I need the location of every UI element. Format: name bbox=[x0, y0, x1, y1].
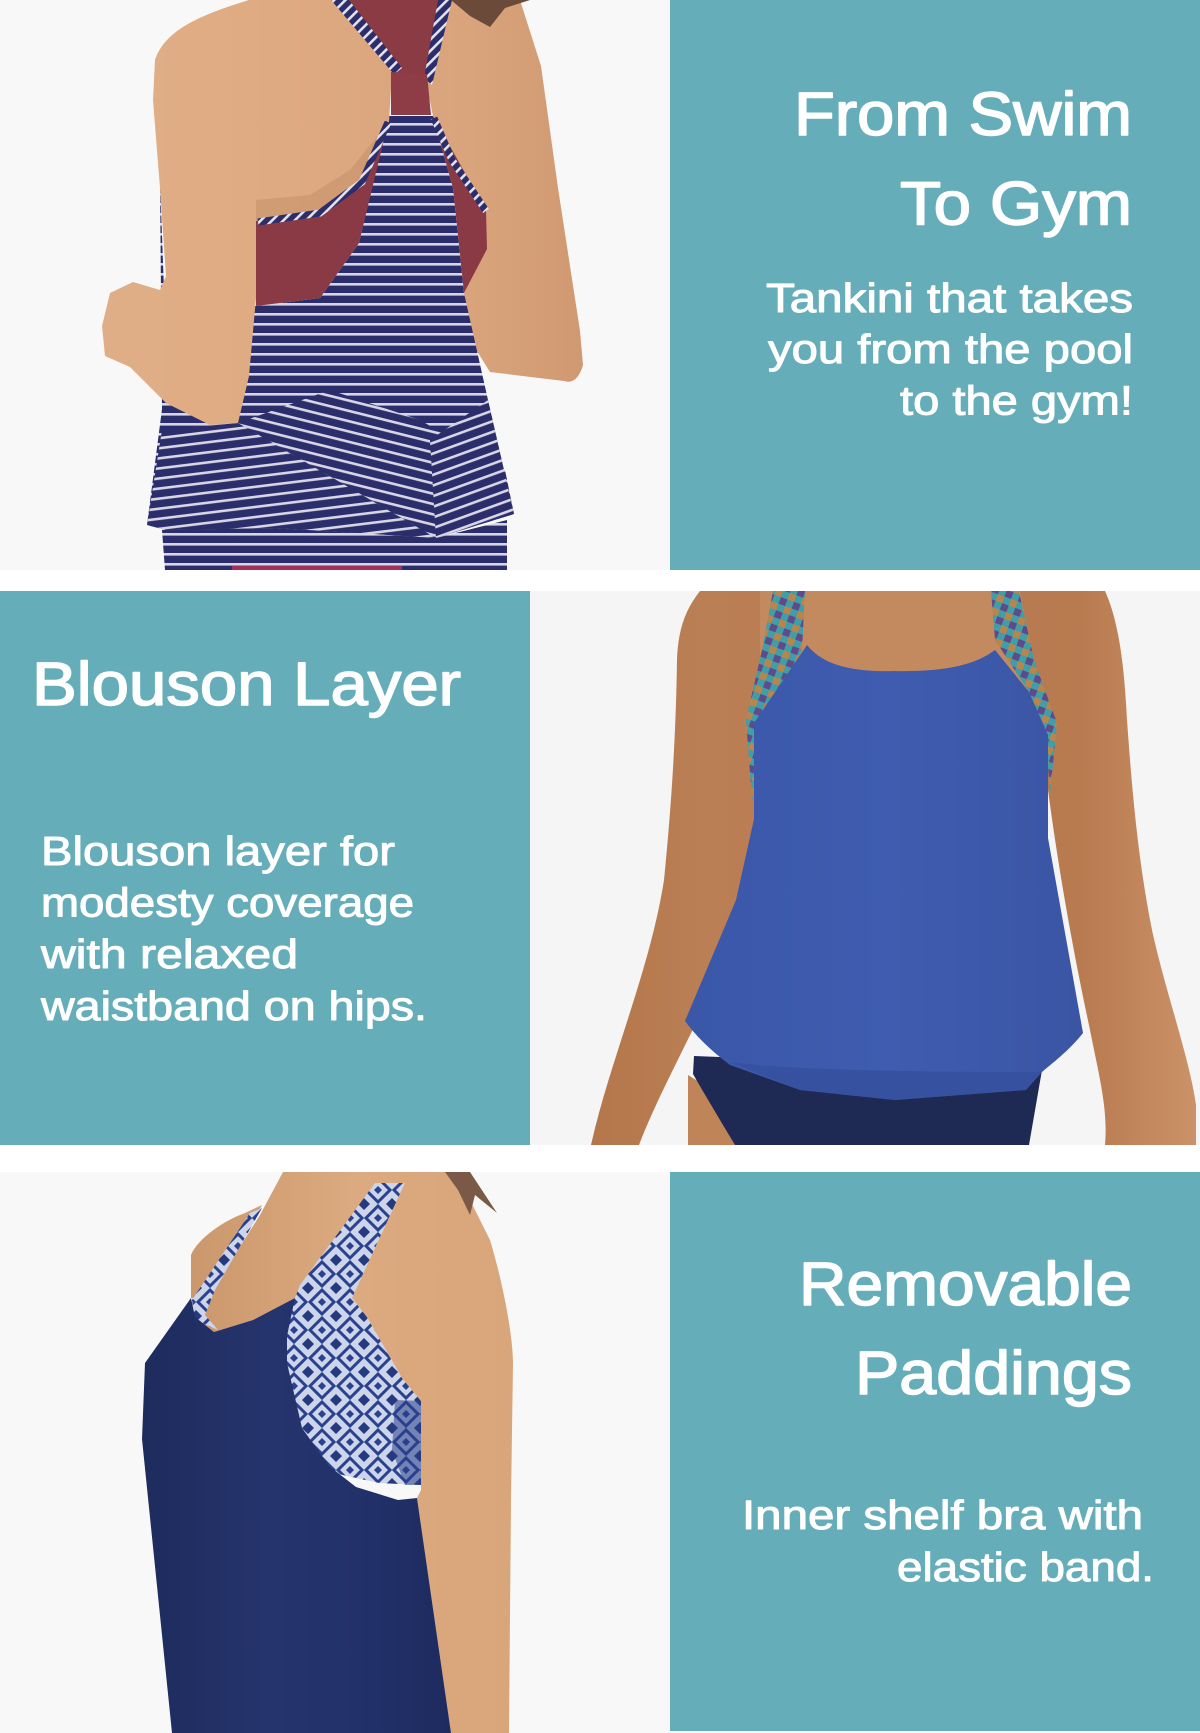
briefs bbox=[693, 1056, 1042, 1145]
right shoulder and arm skin bbox=[425, 0, 583, 382]
waistband bbox=[162, 520, 507, 570]
heading: from swim to gym: To Gym bbox=[900, 170, 1132, 238]
text: blouson description: Blouson layer for bbox=[41, 828, 395, 874]
text: blouson description: modesty coverage bbox=[41, 880, 414, 926]
upper maroon strap bbox=[345, 0, 442, 77]
maroon bra right bbox=[433, 116, 487, 293]
heading: from swim to gym bbox=[794, 80, 1132, 238]
tie-dye patch bbox=[392, 1400, 421, 1485]
hair bbox=[451, 0, 530, 27]
right arm and shoulder bbox=[1017, 591, 1196, 1145]
heading: removable paddings: Paddings bbox=[855, 1339, 1132, 1407]
teal panel: from swim to gym bbox=[670, 0, 1200, 570]
print straps bbox=[746, 591, 805, 800]
neck and chest bbox=[195, 1172, 410, 1332]
back shadow bbox=[256, 122, 389, 221]
waistband fold bbox=[730, 1062, 1042, 1100]
blue blouson bbox=[685, 645, 1083, 1100]
text: blouson description: waistband on hips. bbox=[40, 983, 427, 1029]
heading: removable paddings: Removable bbox=[799, 1250, 1132, 1318]
leg bbox=[688, 1075, 735, 1145]
panel: removable paddings row bbox=[0, 1172, 1200, 1733]
left shoulder bbox=[191, 1205, 262, 1300]
navy blouson bbox=[142, 1298, 451, 1733]
heading: blouson layer: Blouson Layer bbox=[32, 650, 461, 718]
print bra and strap bbox=[280, 1183, 421, 1485]
torso bbox=[760, 591, 1040, 760]
panel: blouson layer row bbox=[0, 591, 1200, 1145]
left arm bbox=[591, 591, 780, 1145]
photo: side view navy tankini bbox=[0, 1172, 670, 1733]
heading: from swim to gym: From Swim bbox=[794, 80, 1132, 148]
photo: back view striped tankini bbox=[0, 0, 670, 570]
teal panel: removable paddings bbox=[670, 1172, 1200, 1731]
text: blouson description bbox=[40, 828, 427, 1029]
maroon bra left bbox=[256, 120, 389, 306]
left strap print bbox=[192, 1208, 262, 1330]
photo: front view blue tankini bbox=[530, 591, 1200, 1145]
striped top bbox=[147, 116, 514, 538]
text: shelf bra description: Inner shelf bra with bbox=[742, 1492, 1143, 1538]
panel: swim to gym row bbox=[0, 0, 1200, 570]
knot bbox=[391, 72, 431, 115]
back and arm skin bbox=[102, 0, 392, 425]
text: tankini description: Tankini that takes bbox=[766, 275, 1133, 321]
text: shelf bra description: elastic band. bbox=[897, 1544, 1154, 1590]
heading: removable paddings bbox=[799, 1250, 1132, 1407]
text: tankini description bbox=[766, 275, 1133, 424]
text: shelf bra description bbox=[742, 1492, 1154, 1590]
text: tankini description: you from the pool bbox=[768, 326, 1133, 372]
hair bbox=[445, 1172, 497, 1215]
text: tankini description: to the gym! bbox=[900, 378, 1133, 424]
teal panel: blouson layer bbox=[0, 591, 530, 1145]
strap binding bbox=[258, 118, 486, 222]
text: blouson description: with relaxed bbox=[40, 931, 298, 977]
shoulder and arm bbox=[352, 1172, 513, 1733]
